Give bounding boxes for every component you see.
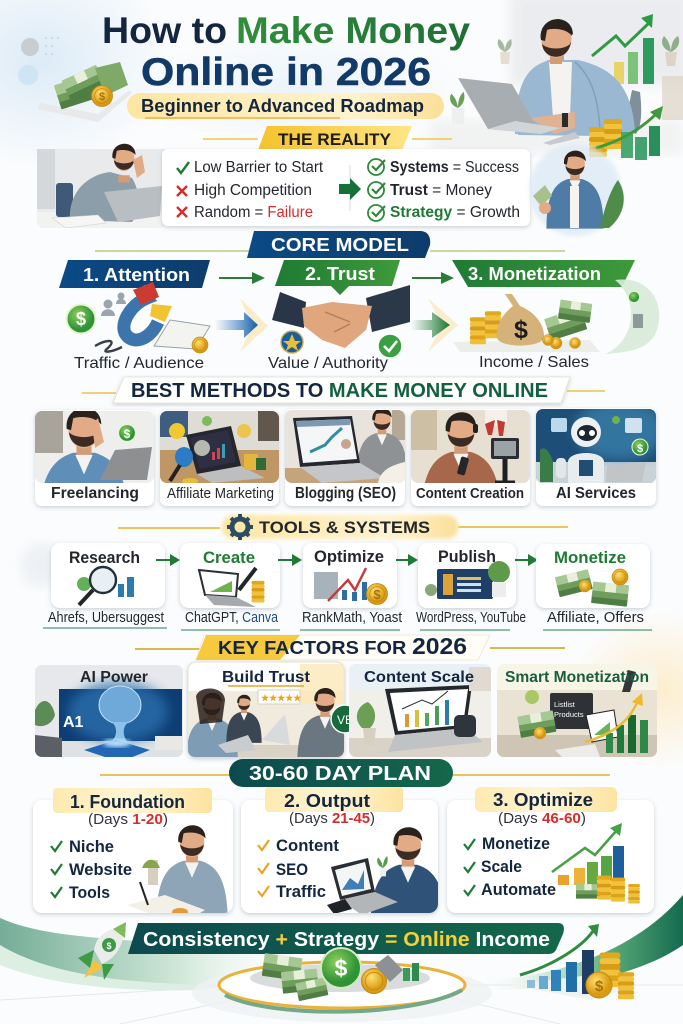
card: AI services: AI Services — [556, 485, 636, 502]
card: content creation — [411, 409, 530, 521]
step: create: ChatGPT, Canva — [185, 610, 279, 626]
card: AI power: A1 — [63, 714, 84, 731]
arrow — [156, 554, 180, 566]
icon: bar chart with coins — [512, 924, 640, 1000]
card: blogging — [285, 408, 407, 506]
step: research: Ahrefs, Ubersuggest — [48, 610, 164, 626]
photo: happy man with cash — [529, 144, 624, 236]
right checklist — [368, 159, 520, 221]
step: optimize: Optimize — [314, 548, 384, 566]
step: optimize: $ — [373, 587, 381, 602]
left checklist: Random = Failure — [194, 204, 313, 221]
title — [102, 10, 470, 94]
arrow to monetization — [412, 272, 454, 284]
panel: plan step 2 output: (Days 21-45) — [289, 811, 375, 827]
growth chart and coins — [552, 823, 640, 904]
step: research: Research — [69, 549, 140, 567]
decorative ring with coin — [605, 279, 659, 354]
panel: key factors — [35, 662, 657, 764]
step: optimize: RankMath, Yoast — [302, 610, 402, 626]
background swooshes bottom — [0, 895, 683, 1024]
panel: plan step 2 output — [239, 787, 440, 916]
icon: money stack on tray: $ — [99, 91, 105, 103]
heading: best methods: BEST METHODS TO MAKE MONEY ONLINE — [131, 380, 548, 402]
slogan banner — [128, 923, 564, 954]
right checklist: Trust = Money — [390, 182, 492, 199]
photo: stressed man — [37, 144, 167, 228]
left checklist: High Competition — [194, 182, 312, 199]
icon: bar chart with coins: $ — [595, 978, 604, 995]
panel: the reality — [37, 144, 624, 236]
heading: tools and systems: TOOLS & SYSTEMS — [259, 518, 430, 537]
card: smart monetization — [497, 664, 657, 757]
heading: key factors — [135, 633, 565, 660]
hero scene: man on laptop with charts — [430, 0, 683, 160]
step: attention — [59, 260, 210, 288]
step: monetize: Monetize — [554, 549, 626, 567]
heading: 30-60 day plan — [100, 759, 610, 787]
decorative dots and circles top left — [18, 37, 59, 85]
left checklist — [177, 159, 324, 221]
checklist: Niche — [69, 837, 114, 856]
step: create — [180, 543, 280, 626]
arrow: blue to handshake — [215, 298, 268, 352]
checklist: Traffic — [276, 882, 326, 901]
arrow — [339, 178, 361, 200]
card: AI services: $ — [637, 443, 643, 455]
tab — [265, 787, 403, 812]
step: publish: WordPress, YouTube — [416, 610, 526, 626]
captions: Value / Authority — [268, 355, 388, 372]
card: AI power — [35, 665, 183, 762]
icon: magnet and audience: $ — [76, 309, 86, 329]
card: freelancing — [33, 410, 156, 510]
captions: Traffic / Audience — [74, 355, 204, 372]
panel: plan step 1 foundation: (Days 1-20) — [88, 812, 168, 828]
heading: the reality: THE REALITY — [278, 130, 392, 149]
card: content scale: Content Scale — [364, 669, 474, 686]
phone — [543, 132, 580, 145]
icon: platform with money and coin — [192, 948, 492, 1022]
icon: money bag, coins, bills — [453, 294, 600, 352]
icon: money stack on tray — [38, 62, 132, 122]
plant left of hero — [498, 39, 512, 64]
title: Online in 2026 — [141, 51, 431, 94]
step: trust: 2. Trust — [305, 264, 375, 284]
checklist: Tools — [69, 883, 110, 902]
left checklist: Low Barrier to Start — [194, 159, 324, 176]
icon: magnet and audience — [66, 282, 210, 353]
right checklist: Strategy = Growth — [390, 204, 520, 221]
panel: plan step 3 optimize — [447, 787, 654, 913]
card: build trust: Build Trust — [222, 669, 311, 686]
subtitle pill — [127, 93, 444, 119]
heading: tools and systems — [118, 514, 568, 540]
plant right of hero — [662, 36, 679, 66]
panel: plan step 3 optimize: (Days 46-60) — [498, 811, 586, 827]
arrow — [278, 554, 302, 566]
heading: core model: CORE MODEL — [271, 235, 409, 255]
icon: platform with money and coin: $ — [335, 955, 348, 981]
tab: 1. Foundation — [70, 792, 185, 812]
step: publish: Publish — [438, 548, 496, 566]
right checklist: Systems = Success — [390, 159, 519, 176]
step: monetization — [452, 260, 635, 287]
icon: growth chart top — [592, 14, 654, 84]
icon: rocket — [78, 922, 126, 980]
checklist: Website — [69, 860, 132, 879]
badge: VE — [337, 713, 353, 727]
tab — [53, 788, 212, 813]
panel: tools flow — [43, 543, 652, 630]
subtitle pill: Beginner to Advanced Roadmap — [141, 96, 424, 116]
card: smart monetization: Listlist — [554, 700, 576, 709]
step: monetize: Affiliate, Offers — [547, 610, 644, 626]
small plant on desk — [450, 92, 465, 124]
panel: methods — [33, 408, 658, 510]
heading: best methods — [82, 377, 605, 403]
step: create: Create — [203, 549, 255, 567]
checklist: Scale — [481, 857, 522, 876]
icon: gear — [227, 514, 253, 540]
card: build trust: ★★★★★ — [261, 693, 302, 703]
card: affiliate marketing: Affiliate Marketing — [167, 486, 274, 502]
laptop — [458, 78, 560, 134]
step: trust — [275, 260, 400, 295]
tab: 2. Output — [284, 791, 370, 811]
heading: 30-60 day plan: 30-60 DAY PLAN — [249, 763, 431, 785]
step: monetize — [536, 544, 650, 626]
checklist — [464, 834, 556, 899]
card: blogging: Blogging (SEO) — [295, 485, 396, 502]
step: monetization: 3. Monetization — [468, 264, 601, 284]
card: AI power: AI Power — [80, 669, 148, 686]
coin stacks and chart — [589, 106, 663, 160]
card: smart monetization: Products — [554, 710, 584, 719]
title: How to — [102, 10, 227, 51]
card: content scale — [349, 664, 491, 757]
icon: money bag, coins, bills: $ — [514, 316, 528, 344]
checklist — [51, 837, 132, 902]
slogan banner: Consistency + Strategy = Online Income — [143, 929, 550, 951]
card: AI services — [536, 400, 665, 506]
arrow — [515, 554, 538, 566]
step: publish — [416, 543, 526, 626]
checklist: Automate — [481, 880, 556, 899]
card: smart monetization: Smart Monetization — [505, 669, 649, 686]
step: attention: 1. Attention — [83, 265, 190, 285]
card: build trust — [186, 662, 359, 764]
icon: handshake — [272, 285, 410, 358]
icon: rocket: $ — [106, 941, 112, 951]
checklist: Monetize — [482, 834, 550, 853]
tab: 3. Optimize — [493, 790, 593, 810]
checklist — [258, 836, 339, 901]
title: Make Money — [236, 10, 470, 51]
arrow to trust — [219, 272, 265, 284]
white checklist card — [162, 149, 530, 226]
step: research — [48, 543, 165, 626]
tab — [475, 787, 617, 812]
heading: the reality — [203, 126, 452, 150]
panel: core model — [59, 260, 659, 372]
heading: key factors: KEY FACTORS FOR 2026 — [218, 633, 467, 659]
captions — [74, 354, 589, 372]
heading: core model — [95, 231, 565, 258]
checklist: SEO — [276, 860, 308, 879]
badge — [331, 705, 359, 733]
panel: plan step 1 foundation — [33, 788, 233, 925]
arrow: green to money — [411, 298, 458, 352]
captions: Income / Sales — [479, 354, 589, 371]
card: freelancing: $ — [124, 427, 131, 441]
man in blue shirt — [515, 19, 635, 136]
card: affiliate marketing — [160, 410, 279, 506]
card: content creation: Content Creation — [416, 486, 524, 502]
checklist: Content — [276, 836, 339, 855]
arrow — [396, 554, 418, 566]
step: optimize — [302, 543, 402, 626]
card: freelancing: Freelancing — [51, 485, 139, 502]
